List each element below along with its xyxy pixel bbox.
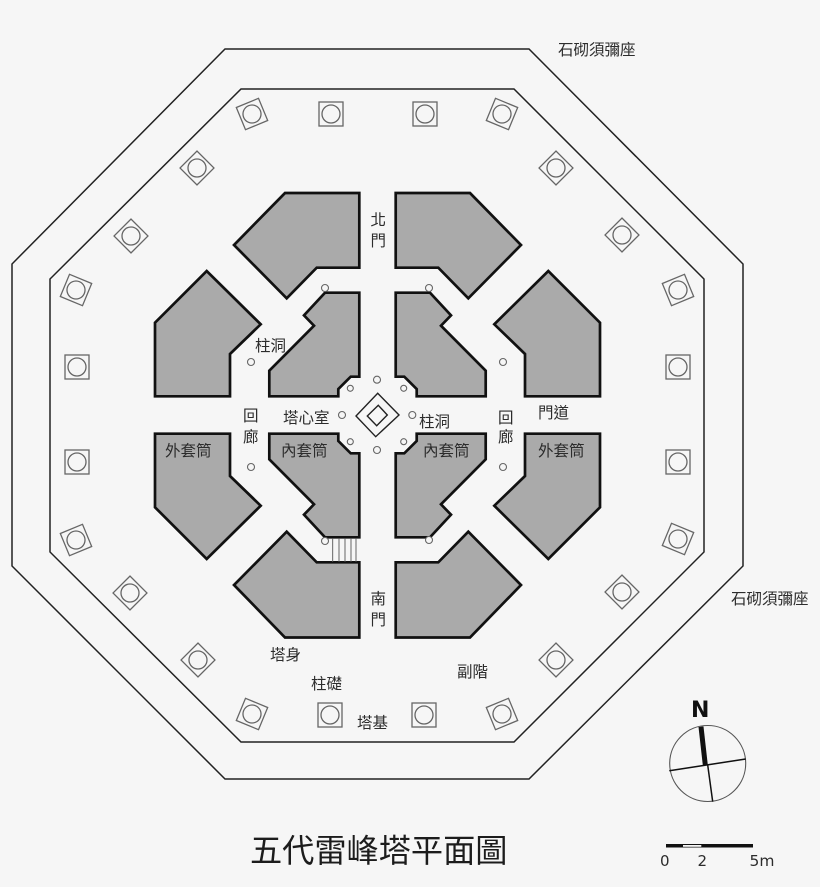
- labels: 門: [370, 612, 386, 629]
- labels: 廊: [243, 428, 259, 446]
- labels: 外套筒: [165, 442, 212, 460]
- labels: 回: [243, 408, 259, 425]
- labels: 北: [370, 211, 386, 229]
- labels: 回: [498, 410, 514, 427]
- column bases ring: [60, 98, 694, 730]
- inner octagon: pagoda base: [50, 89, 704, 742]
- labels: 塔心室: [283, 409, 330, 427]
- labels: 石砌須彌座: [558, 41, 636, 59]
- north compass: N: [691, 698, 709, 723]
- labels: 門道: [538, 404, 570, 422]
- labels: 外套筒: [538, 442, 585, 460]
- central diamond: pagoda heart chamber: [356, 393, 399, 437]
- scale bar: 2: [698, 852, 707, 870]
- title: 五代雷峰塔平面圖: [250, 833, 508, 869]
- small column holes: [248, 284, 506, 544]
- labels: 內套筒: [423, 442, 470, 460]
- labels: 柱洞: [419, 413, 450, 431]
- stairs: [333, 538, 356, 562]
- scale bar: 5m: [750, 852, 774, 870]
- labels: 塔基: [357, 714, 388, 732]
- labels: 門: [370, 233, 386, 250]
- labels: 柱洞: [255, 337, 286, 355]
- scale bar: [660, 844, 774, 870]
- labels: 柱礎: [311, 675, 343, 693]
- labels: 廊: [498, 428, 514, 446]
- labels: 南: [370, 590, 386, 608]
- north compass: [669, 698, 746, 802]
- inner casing wall blocks: [269, 293, 486, 537]
- outer casing wall blocks: [155, 193, 600, 638]
- labels: 副階: [457, 663, 488, 681]
- labels: 塔身: [270, 646, 301, 664]
- labels: 石砌須彌座: [731, 590, 809, 608]
- labels: [165, 41, 809, 732]
- outer octagon: masonry Sumeru base: [12, 49, 743, 779]
- scale bar: 0: [660, 852, 670, 870]
- labels: 內套筒: [281, 442, 328, 460]
